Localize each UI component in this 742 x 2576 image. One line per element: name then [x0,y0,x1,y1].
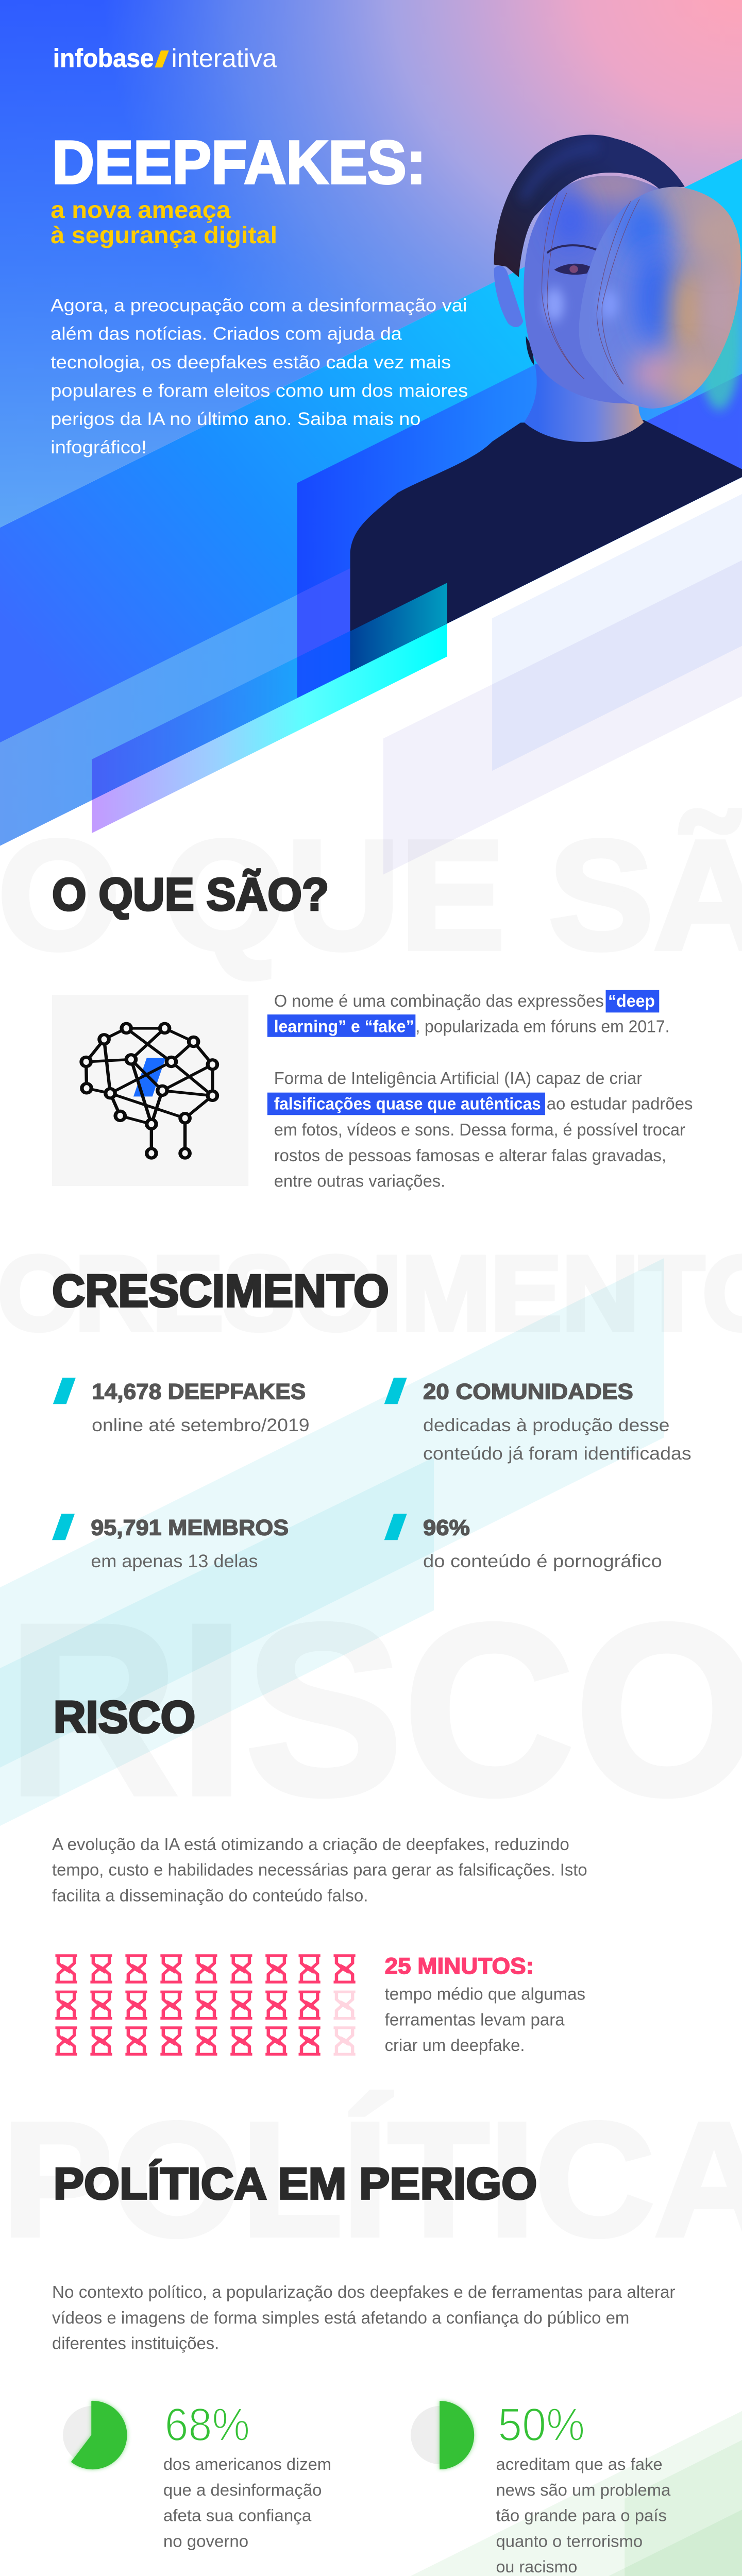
risco text line 1: A evolução da IA está otimizando a criação de deepfakes, reduzindo [52,1835,569,1854]
pie captions left [163,2455,331,2551]
pale green band middle [414,2510,742,2576]
pie captions right: tão grande para o país [496,2506,667,2525]
hero intro text [50,296,468,457]
stat: comunidades: conteúdo já foram identificadas [423,1444,692,1464]
cyan mask glow [698,271,740,410]
mask colour patches [600,180,742,403]
pie captions right: news são um problema [496,2481,670,2500]
hero pink glow [0,0,742,528]
pale cyan band large [0,1258,664,1768]
description text: rostos de pessoas famosas e alterar falas gravadas, [274,1146,666,1165]
stat: membros: em apenas 13 delas [91,1551,258,1571]
stat: membros: 95,791 MEMBROS [91,1515,289,1540]
pale green band right [625,2440,742,2576]
hero band: deep blue parallelogram [297,262,742,698]
description text: learning” e “fake” [274,1017,414,1036]
risco text: facilita a disseminação do conteúdo falso. [52,1886,368,1905]
mask [579,187,741,409]
blue slash inside brain [133,1058,165,1096]
logo: infobase interativa: interativa [171,43,277,73]
value 50%: 50% [498,2399,585,2451]
pie chart 50% [411,2401,474,2469]
subtitle [50,197,277,248]
sweater [350,420,742,672]
hero band: cyan to purple overlay [92,583,447,833]
política text: diferentes instituições. [52,2334,219,2353]
pale green band large [0,2411,742,2576]
panel: hero [0,0,742,846]
pie captions left: afeta sua confiança [163,2506,311,2525]
hero photo: woman holding a mask [350,134,742,730]
stat: pornográfico [384,1514,662,1571]
title: DEEPFAKES: [52,128,426,196]
callout: 25 minutos [385,1954,585,2055]
description text: ao estudar padrões [547,1094,693,1113]
description text: Forma de Inteligência Artificial (IA) capaz de criar [274,1069,642,1088]
logo: infobase interativa: infobase [53,43,154,73]
description text: , popularizada em fóruns em 2017. [415,1017,669,1036]
hero intro text: além das notícias. Criados com ajuda da [50,324,402,344]
hero intro text: infográfico! [50,437,147,457]
description text: falsificações quase que autênticas [274,1094,541,1113]
heading: O QUE SÃO? [52,869,329,920]
heading crescimento: CRESCIMENTO [52,1265,389,1316]
pie captions right: acreditam que as fake [496,2455,663,2474]
stat: deepfakes: online até setembro/2019 [92,1415,310,1435]
pale cyan band small [0,1458,434,1826]
stat: pornográfico: do conteúdo é pornográfico [423,1551,662,1571]
highlight box: learning e fake [267,1014,415,1037]
stat: membros [52,1514,289,1571]
stat: comunidades [384,1378,692,1464]
stat: comunidades: dedicadas à produção desse [423,1415,669,1435]
pie captions left: no governo [163,2532,248,2551]
description text: “deep [608,991,655,1010]
brain network icon box [52,995,248,1186]
panel: risco e política [3,1860,742,2472]
subtitle: a nova ameaça [50,197,231,223]
panel: fogo contra fogo [163,2411,742,2576]
brow [547,245,597,253]
política text [52,2282,676,2353]
callout: 25 minutos: tempo médio que algumas [385,1985,585,2004]
brain nodes [81,1024,217,1158]
hero gradient background [0,0,742,528]
face colour patches [545,166,657,321]
callout: 25 minutos: ferramentas levam para [385,2010,565,2029]
panel: crescimento e risco [0,1234,742,1854]
highlight box: falsificações [267,1093,545,1115]
brain edges [86,1028,212,1154]
face [524,176,659,405]
highlight box: deep [606,990,659,1012]
loose hair strands [542,193,584,379]
risco text: tempo, custo e habilidades necessárias para gerar as falsificações. Isto [52,1860,587,1879]
hourglass pictogram [55,1956,356,2054]
risco text [52,1860,587,1905]
hero band: deep blue lower part [297,374,742,698]
pie chart 68% [63,2401,127,2469]
hero intro text: perigos da IA no último ano. Saiba mais no [50,409,420,429]
pie captions left: dos americanos dizem [163,2455,331,2474]
heading política: POLÍTICA EM PERIGO [54,2159,537,2209]
pale band B [383,560,742,874]
stat: pornográfico: 96% [423,1515,470,1540]
pie captions left: que a desinformação [163,2481,322,2500]
pie captions right [496,2455,670,2576]
description text: entre outras variações. [274,1172,445,1191]
heading risco: RISCO [54,1692,195,1742]
ear [494,266,523,327]
woman portrait [494,134,742,442]
pie captions right: quanto o terrorismo [496,2532,643,2551]
eye [554,264,590,275]
hero band: bright blue [0,159,742,846]
nape hair [526,336,534,365]
description text [274,991,693,1191]
description text: O nome é uma combinação das expressões [274,991,604,1010]
callout: 25 minutos: criar um deepfake. [385,2036,525,2055]
callout: 25 minutos: 25 MINUTOS: [385,1954,534,1979]
hair blue sheen [522,147,599,199]
panel: o que são [0,494,742,1191]
política text: vídeos e imagens de forma simples está afetando a confiança do público em [52,2308,629,2327]
hero intro text: Agora, a preocupação com a desinformação vai [50,296,467,316]
hero band: light blue [0,374,742,846]
hero intro text: tecnologia, os deepfakes estão cada vez mais [50,352,451,372]
iris [569,265,578,273]
pale band A [492,494,742,771]
subtitle: à segurança digital [50,222,277,248]
pie captions right: ou racismo [496,2558,577,2576]
stat: deepfakes: 14,678 DEEPFAKES [92,1379,306,1404]
mask strands [597,199,639,384]
logo: infobase interativa [53,43,277,73]
neck [524,363,644,442]
value 68%: 68% [165,2399,250,2451]
hero intro text: populares e foram eleitos como um dos maiores [50,381,468,401]
stat: deepfakes [53,1378,310,1435]
hair [494,134,685,277]
hero band: teal over sweater [350,583,447,672]
stat: comunidades: 20 COMUNIDADES [423,1379,633,1404]
